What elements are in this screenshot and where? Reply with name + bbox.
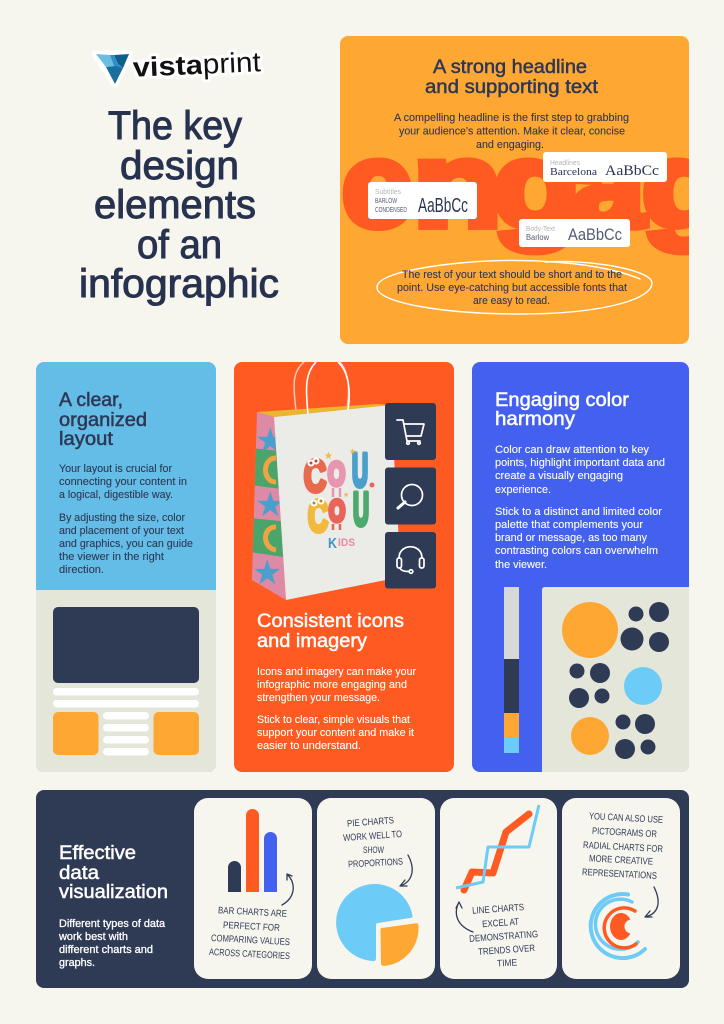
body text: different charts and: [59, 944, 153, 956]
body text: points, highlight important data and: [495, 457, 665, 469]
heading: and supporting text: [425, 76, 599, 98]
title: design: [120, 144, 239, 188]
heading: A clear,: [59, 389, 123, 411]
body text: palette that complements your: [495, 519, 643, 531]
heading: organized: [59, 409, 147, 431]
shopping bag: [250, 362, 401, 605]
arrow: [282, 874, 293, 905]
caption: EXCEL AT: [482, 917, 520, 930]
font card: subtitles: CONDENSED: [375, 205, 407, 214]
back handle: [294, 362, 349, 411]
bag logo: C: [308, 492, 328, 541]
bag logo: ★: [343, 491, 349, 499]
font card: subtitles: Subtitles: [375, 189, 401, 196]
arrow: [456, 902, 473, 932]
font card: body text: Barlow: [526, 233, 549, 242]
font card: body text: Body-Text: [526, 226, 555, 233]
bag side panel: [252, 412, 286, 600]
panel: icons and imagery: [234, 362, 454, 772]
caption: [469, 902, 538, 970]
body text: and placement of your text: [59, 525, 184, 537]
icon: magnifying glass: [385, 468, 436, 524]
caption: REPRESENTATIONS: [582, 867, 657, 882]
bag logo: K: [328, 535, 337, 552]
font card: headlines: Barcelona: [550, 167, 598, 178]
caption: WORK WELL TO: [343, 829, 402, 844]
body text: Stick to a distinct and limited color: [495, 506, 662, 518]
caption: PICTOGRAMS OR: [592, 826, 657, 840]
panel: data visualization: [36, 790, 689, 988]
card: line chart: [440, 798, 557, 979]
bag logo: IDS: [338, 537, 355, 549]
heading: layout: [59, 428, 114, 450]
heading: [425, 56, 599, 98]
font card: body text: AaBbCc: [568, 225, 622, 244]
bag side panel: ★: [252, 554, 282, 592]
body text: Icons and imagery can make your: [257, 666, 416, 678]
caption: TIME: [497, 957, 517, 970]
body text: direction.: [59, 564, 104, 576]
heading: [59, 389, 147, 450]
body text: the viewer in the right: [59, 551, 164, 563]
supporting text: and engaging.: [476, 139, 544, 151]
logo wordmark: print: [202, 46, 262, 80]
bag logo: C: [304, 452, 326, 501]
body text: easier to understand.: [257, 740, 361, 752]
body text: contrasting colors can overwhelm: [495, 545, 658, 557]
closing text: The rest of your text should be short and to the: [402, 269, 622, 281]
line chart: [456, 805, 539, 890]
caption: PERFECT FOR: [223, 920, 280, 934]
body text: graphs.: [59, 957, 95, 969]
bag logo: ★: [324, 451, 333, 462]
front handle: [307, 362, 349, 414]
panel: strong headline: [340, 36, 724, 344]
icon: shopping cart: [385, 403, 436, 460]
icon: vistaprint triangle mark: [95, 54, 130, 84]
heading: [495, 389, 630, 430]
body text: Stick to clear, simple visuals that: [257, 714, 410, 726]
body text: infographic more engaging and: [257, 679, 407, 691]
body text: and graphics, you can guide: [59, 538, 193, 550]
bag logo: U: [352, 444, 368, 496]
font card: subtitles: AaBbCc: [418, 195, 468, 217]
big engage lettering: n: [413, 118, 502, 252]
color proportion circles: [542, 587, 689, 772]
caption: RADIAL CHARTS FOR: [583, 840, 663, 855]
heading: [257, 610, 404, 652]
bag front: [274, 405, 401, 600]
bag logo: O: [329, 495, 345, 528]
body text: connecting your content in: [59, 476, 187, 488]
bag side panel: ★: [255, 422, 285, 460]
hand-drawn ellipse: [377, 260, 652, 314]
caption: PIE CHARTS: [347, 815, 394, 830]
title: of an: [137, 223, 222, 267]
closing text: are easy to read.: [473, 295, 550, 307]
big engage lettering: g: [493, 118, 581, 252]
body text: Different types of data: [59, 918, 166, 930]
closing text: [397, 269, 627, 307]
big engage lettering: a: [572, 117, 646, 252]
heading: [59, 842, 168, 903]
card: bar chart: [194, 798, 312, 979]
heading: Effective: [59, 842, 136, 864]
caption: YOU CAN ALSO USE: [589, 811, 663, 826]
heading: data: [59, 862, 99, 884]
supporting text: [394, 112, 629, 151]
body text: Color can draw attention to key: [495, 444, 650, 456]
font card: body text: [519, 219, 630, 247]
logo: vistaprint: [95, 46, 262, 84]
body text: By adjusting the size, color: [59, 512, 185, 524]
heading: Engaging color: [495, 389, 630, 411]
caption: PROPORTIONS: [348, 857, 403, 870]
big engage lettering: [342, 157, 689, 256]
bag logo: [304, 444, 374, 552]
caption: LINE CHARTS: [472, 902, 524, 917]
font card: headlines: AaBbCc: [605, 163, 659, 179]
body text: create a visually engaging: [495, 470, 623, 482]
heading: A strong headline: [433, 56, 587, 78]
caption: [343, 815, 403, 870]
pie chart: [336, 884, 419, 966]
bag logo: O: [328, 456, 345, 492]
caption: [582, 811, 663, 882]
body text: Your layout is crucial for: [59, 463, 172, 475]
body text: support your content and make it: [257, 727, 414, 739]
font card: headlines: Headlines: [550, 160, 580, 167]
body text: a logical, digestible way.: [59, 489, 173, 501]
heading: Consistent icons: [257, 610, 404, 632]
supporting text: your audience's attention. Make it clear, concise: [399, 126, 625, 138]
caption: MORE CREATIVE: [589, 853, 653, 868]
supporting text: A compelling headline is the first step to grabbing: [394, 112, 629, 124]
body text: work best with: [58, 931, 128, 943]
caption: TRENDS OVER: [478, 943, 536, 958]
heading: and imagery: [257, 630, 367, 652]
body text: strengthen your message.: [257, 692, 380, 704]
icon: headset: [385, 532, 436, 588]
font card: subtitles: BARLOW: [375, 196, 398, 205]
body text: [58, 918, 166, 969]
arrow: [645, 887, 658, 917]
title: [79, 104, 279, 306]
big engage lettering: e: [342, 118, 413, 252]
bar chart: [228, 809, 277, 892]
title: The key: [108, 104, 242, 148]
logo wordmark: [132, 46, 262, 83]
color palette bar: [504, 587, 519, 753]
panel: color harmony: [472, 362, 689, 772]
heading: harmony: [495, 408, 575, 430]
logo wordmark: vista: [132, 50, 205, 83]
font card: subtitles: [368, 182, 477, 219]
heading: visualization: [59, 881, 168, 903]
body text: brand or message, as too many: [495, 532, 647, 544]
body text: [257, 666, 416, 752]
closing text: point. Use eye-catching but accessible fonts that: [397, 282, 627, 294]
layout wireframe: [53, 607, 199, 756]
panel: clear layout: [36, 362, 216, 772]
caption: DEMONSTRATING: [469, 929, 538, 945]
caption: ACROSS CATEGORIES: [209, 947, 290, 962]
arrow: [400, 855, 412, 886]
bag logo: ★: [349, 447, 356, 456]
title: elements: [94, 183, 256, 227]
caption: [209, 905, 290, 962]
body text: [59, 463, 193, 576]
body text: experience.: [495, 484, 551, 496]
title: infographic: [79, 262, 279, 306]
body text: [495, 444, 665, 571]
body text: the viewer.: [495, 559, 547, 571]
radial chart: [591, 894, 645, 958]
caption: COMPARING VALUES: [211, 933, 290, 948]
caption: SHOW: [363, 845, 384, 856]
bag side panel: ★: [255, 486, 285, 524]
bag logo: U: [353, 483, 369, 535]
card: radial chart: [562, 798, 680, 979]
caption: BAR CHARTS ARE: [218, 905, 287, 920]
font card: headlines: [543, 152, 667, 182]
card: pie chart: [317, 798, 435, 979]
bag interior: [257, 404, 391, 417]
